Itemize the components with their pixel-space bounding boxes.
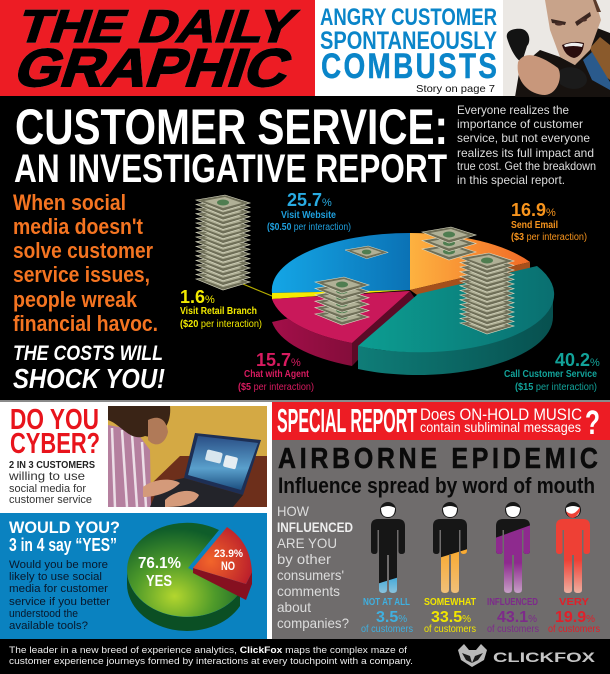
label: chat with agent 15.7%: 15.7% [256,350,301,370]
stat: influenced 43.1%: of customers [487,624,539,635]
pie chart: would you 76.1 / 23.9: 76.1% [138,555,181,572]
panel: do you cyber [0,400,610,639]
banner: special report: Does ON-HOLD MUSIC [420,405,582,424]
money stack: retail branch [196,195,250,290]
panel: would you: 3 in 4 say “YES” [9,535,117,555]
callout: the costs will shock you [13,342,165,394]
label: visit retail branch 1.6% [180,287,262,330]
logo: clickfox: CLICKFOX [493,649,596,665]
intro paragraph: service, but not everyone [457,131,590,145]
stat: influenced 43.1% [487,597,539,635]
question: how influenced: HOW [277,503,310,519]
leader line: retail branch [238,282,272,296]
label: call customer service 40.2% [504,350,600,393]
label: call customer service 40.2%: 40.2% [555,350,600,370]
stat: very 19.9%: 19.9% [555,609,595,626]
pie chart: would you 76.1 / 23.9: 23.9% [214,548,243,560]
panel: would you [0,513,267,639]
label: call customer service 40.2%: ($15 per interaction) [515,382,597,393]
stat: very 19.9% [548,597,600,635]
question: how influenced: companies? [277,615,349,631]
label: visit website 25.7% [267,190,351,233]
stat: very 19.9%: of customers [548,624,600,635]
banner: special report: contain subliminal messages [420,419,581,435]
panel: would you: Would you be more [9,559,108,571]
money stack: chat [315,277,369,325]
label: chat with agent 15.7%: ($5 per interaction) [238,382,314,393]
footer text: The leader in a new breed of experience analytics, ClickFox maps the complex maze of [9,645,407,656]
masthead: The Daily Graphic: GRAPHIC [8,38,300,98]
stat: somewhat 33.5%: of customers [424,624,476,635]
headline: angry customer [315,0,503,96]
orange statement text: When social [13,190,126,215]
panel: would you: likely to use social [9,571,102,583]
money: website single bill [345,246,388,259]
stat: not at all 3.5%: 3.5% [376,609,407,626]
stat: not at all 3.5% [361,597,413,635]
intro paragraph: in this special report. [457,173,565,187]
panel: do you cyber: willing to use [8,469,85,483]
photo: woman at laptop [108,406,267,507]
question: how influenced: consumers' [277,567,344,583]
label: visit retail branch 1.6%: 1.6% [180,287,215,307]
title: customer service investigative report: AN INVESTIGATIVE REPORT [14,147,447,191]
photo: shouting man with phone [503,0,610,97]
panel: would you: available tools? [9,620,88,632]
panel: would you: WOULD YOU? [9,518,120,537]
figure: not at all [370,502,406,594]
figure: very [555,502,591,594]
callout: the costs will shock you: THE COSTS WILL [13,342,163,365]
panel: would you: understood the [9,608,78,620]
stat: very 19.9%: VERY [559,597,589,608]
label: visit website 25.7%: 25.7% [287,190,332,210]
footer text [9,645,413,667]
question: how influenced: comments [277,583,340,599]
money stack: call [460,253,514,334]
label: visit website 25.7%: Visit Website [281,210,336,221]
banner: special report: ? [585,404,600,442]
label: visit website 25.7%: ($0.50 per interaction) [267,222,351,233]
label: send email 16.9%: 16.9% [511,200,556,220]
orange statement text: financial havoc. [13,311,158,336]
intro paragraph: realizes its full impact and [457,146,594,160]
figure: influenced [495,502,531,594]
label: visit retail branch 1.6%: Visit Retail Branch [180,306,257,317]
panel: do you cyber: 2 IN 3 CUSTOMERS [9,460,95,471]
stat: somewhat 33.5% [424,597,476,635]
stat: not at all 3.5%: NOT AT ALL [363,597,410,608]
stat: not at all 3.5%: of customers [361,624,413,635]
orange statement text: people wreak [13,287,138,312]
question: how influenced: about [277,599,311,615]
pie chart: would you 76.1 / 23.9: NO [221,559,235,573]
label: send email 16.9%: ($3 per interaction) [511,232,587,243]
intro paragraph [457,103,596,187]
intro paragraph: Everyone realizes the [457,103,569,117]
headline: angry customer: SPONTANEOUSLY [320,27,497,55]
panel: would you: media for customer [9,583,108,595]
masthead: The Daily Graphic: THE DAILY [12,1,303,53]
label: chat with agent 15.7% [238,350,314,393]
banner: special report: SPECIAL REPORT [277,402,417,439]
orange statement text: media doesn't [13,214,144,239]
headline: angry customer: COMBUSTS [321,46,497,86]
label: send email 16.9% [511,200,587,243]
callout: the costs will shock you: SHOCK YOU! [13,363,165,394]
pie chart: would you 76.1 / 23.9: YES [146,573,172,590]
panel: do you cyber: customer service [9,494,92,506]
intro paragraph: importance of customer [457,117,583,131]
stat: somewhat 33.5%: SOMEWHAT [424,597,476,608]
label: send email 16.9%: Send Email [511,220,558,231]
stat: somewhat 33.5%: 33.5% [431,609,471,626]
panel: airborne epidemic [272,440,610,639]
masthead: The Daily Graphic [0,0,315,98]
question: how influenced: ARE YOU [277,535,337,551]
stat: influenced 43.1%: 43.1% [497,609,537,626]
pie chart: would you 76.1 / 23.9 [127,523,252,631]
panel: do you cyber: CYBER? [10,428,100,460]
panel: would you: service if you better [9,596,110,608]
panel: airborne epidemic: AIRBORNE EPIDEMIC [278,442,598,474]
orange statement text: service issues, [13,262,150,287]
intro paragraph: true cost. Get the breakdown [457,159,596,173]
orange statement text [13,190,158,336]
logo: clickfox [458,644,596,667]
figure: somewhat [432,502,468,594]
label: visit retail branch 1.6%: ($20 per interaction) [180,319,262,330]
panel: do you cyber: social media for [9,483,86,495]
footer text: customer experience journeys formed by interactions at every touchpoint with a company. [9,656,413,667]
question: how influenced [277,503,353,631]
money stack: email [422,227,476,260]
label: call customer service 40.2%: Call Customer Service [504,369,597,380]
question: how influenced: INFLUENCED [277,519,353,535]
panel: do you cyber: DO YOU [10,404,99,436]
3D pie chart: cost of interactions [272,233,554,375]
headline: angry customer: Story on page 7 [416,83,495,95]
question: how influenced: by other [277,551,331,567]
orange statement text: solve customer [13,238,153,263]
headline: angry customer: ANGRY CUSTOMER [320,4,497,31]
title: customer service investigative report [14,99,448,191]
stat: influenced 43.1%: INFLUENCED [487,597,538,608]
title: customer service investigative report: CUSTOMER SERVICE: [15,99,448,155]
label: chat with agent 15.7%: Chat with Agent [244,369,310,380]
